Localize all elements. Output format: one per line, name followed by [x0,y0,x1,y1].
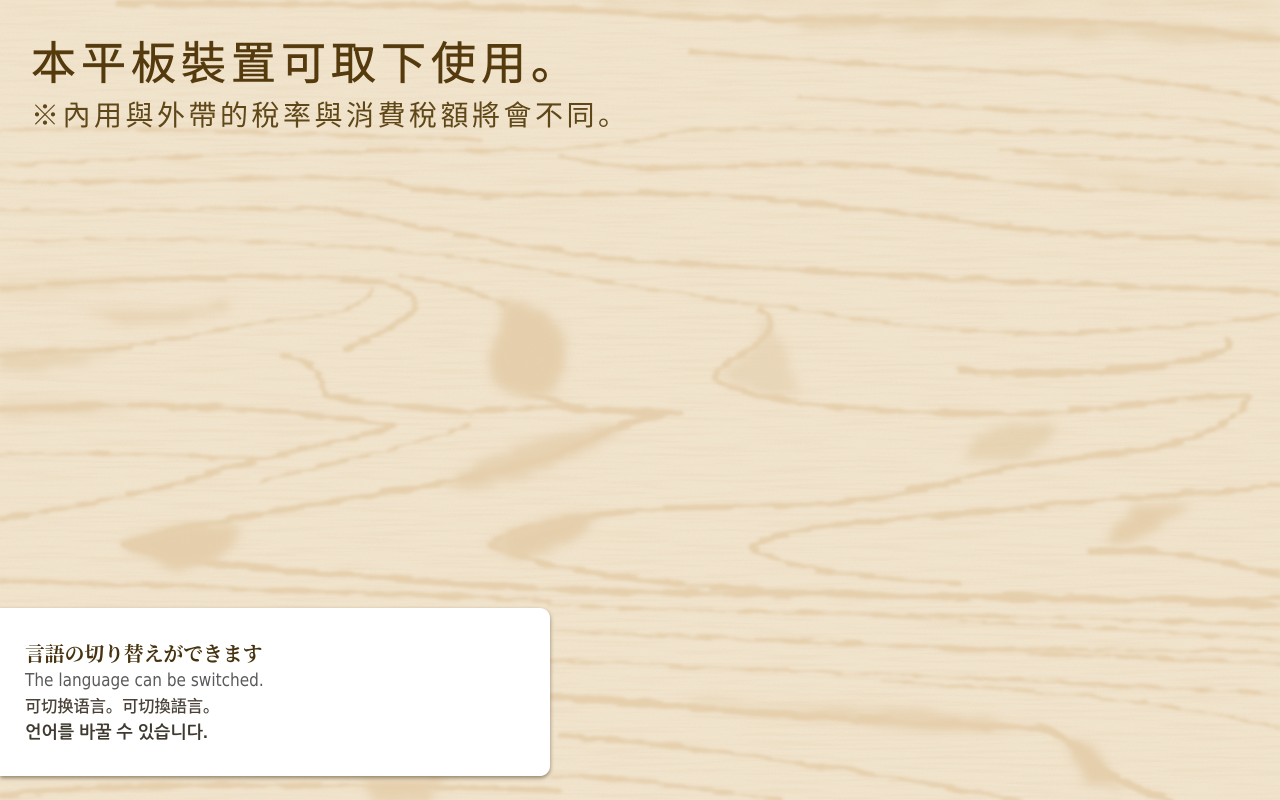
Japanese notice: 言語の切り替えができます [25,638,262,667]
Chinese notice: 可切换语言。可切換語言。 [25,698,219,716]
English notice: The language can be switched. [25,671,264,691]
panel: language switch notice [0,608,550,776]
subtitle note: ※內用與外帶的稅率與消費稅額將會不同。 [31,94,630,134]
Korean notice: 언어를 바꿀 수 있습니다. [25,722,208,742]
title: 本平板裝置可取下使用。 [31,27,581,92]
